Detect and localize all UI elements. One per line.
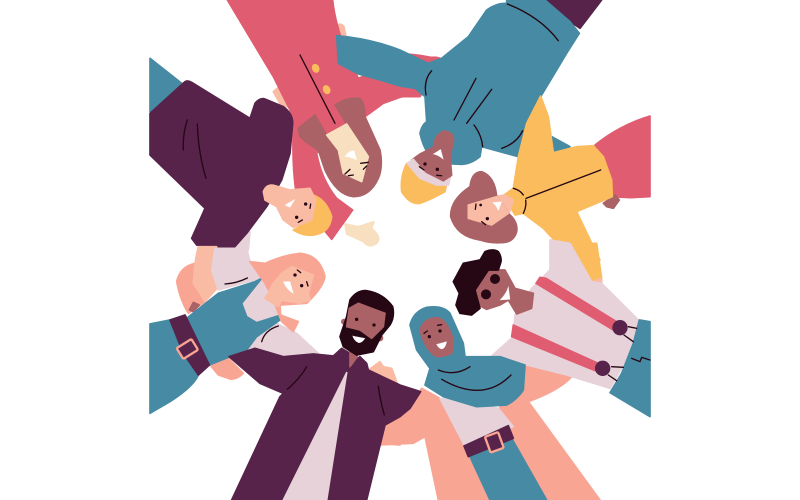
arm and back hair xyxy=(177,263,205,313)
hand xyxy=(368,362,397,383)
smile xyxy=(437,342,447,349)
neck and face xyxy=(475,270,533,314)
hat xyxy=(453,250,501,315)
shirt xyxy=(212,248,260,290)
face xyxy=(263,185,316,227)
smile xyxy=(433,149,443,159)
hair xyxy=(401,163,447,204)
headband xyxy=(407,159,450,185)
zip line and cuffs xyxy=(513,170,601,213)
smile xyxy=(493,202,502,211)
hand xyxy=(345,222,379,246)
smile xyxy=(353,336,365,343)
belt xyxy=(170,315,209,375)
jumper folds xyxy=(183,120,206,178)
neck xyxy=(350,350,357,367)
ears xyxy=(341,319,347,325)
face and neck xyxy=(412,131,454,182)
arm xyxy=(380,418,400,445)
shorts xyxy=(610,320,650,417)
buckle xyxy=(177,339,198,359)
eyes xyxy=(479,204,482,206)
face xyxy=(468,197,508,225)
eyes xyxy=(423,162,427,166)
shirt folds xyxy=(287,367,384,415)
eyes xyxy=(345,162,368,176)
shoe xyxy=(603,195,619,208)
hair xyxy=(250,253,325,332)
face xyxy=(420,318,453,357)
eyes xyxy=(428,335,431,338)
buckle xyxy=(485,432,504,453)
undershirt xyxy=(283,373,347,500)
coat buttons xyxy=(310,63,321,74)
trousers xyxy=(470,438,547,500)
belt xyxy=(464,426,513,457)
skirt xyxy=(150,315,209,413)
suspenders xyxy=(512,277,617,371)
smile xyxy=(345,151,357,160)
face xyxy=(347,303,385,338)
face xyxy=(265,267,313,307)
arms xyxy=(380,388,490,500)
neck xyxy=(495,195,513,212)
hair and beard xyxy=(340,291,393,355)
person: woman in red coat xyxy=(227,0,443,246)
hair xyxy=(451,172,517,243)
person: woman in teal dungarees xyxy=(150,247,325,413)
smile xyxy=(283,282,293,293)
dungarees bib xyxy=(187,278,281,365)
jumper folds xyxy=(425,4,558,148)
sunglasses xyxy=(490,274,500,284)
coat placket line xyxy=(300,55,335,123)
shirt xyxy=(492,240,638,388)
suspender clips xyxy=(612,320,628,335)
jacket xyxy=(504,96,612,267)
person: man in teal jumper xyxy=(337,0,602,204)
person: man in plum jumper xyxy=(150,58,332,250)
hair xyxy=(298,98,381,197)
eyes xyxy=(355,318,358,321)
person: man with suspenders and hat xyxy=(453,240,650,417)
shirt xyxy=(229,348,421,500)
hijab xyxy=(410,307,525,407)
eyes xyxy=(300,284,303,287)
smile xyxy=(285,199,295,207)
skirt xyxy=(595,116,650,198)
hair xyxy=(293,195,332,235)
person: bearded man in plum shirt xyxy=(229,291,421,500)
eyes xyxy=(304,202,307,206)
smile xyxy=(500,287,510,300)
person: woman in hijab xyxy=(380,307,600,500)
salmon arms behind the lower group xyxy=(210,358,572,407)
shirt xyxy=(440,398,513,447)
face xyxy=(327,124,368,182)
hijab folds xyxy=(438,367,511,390)
person: woman in yellow jacket xyxy=(451,96,650,267)
